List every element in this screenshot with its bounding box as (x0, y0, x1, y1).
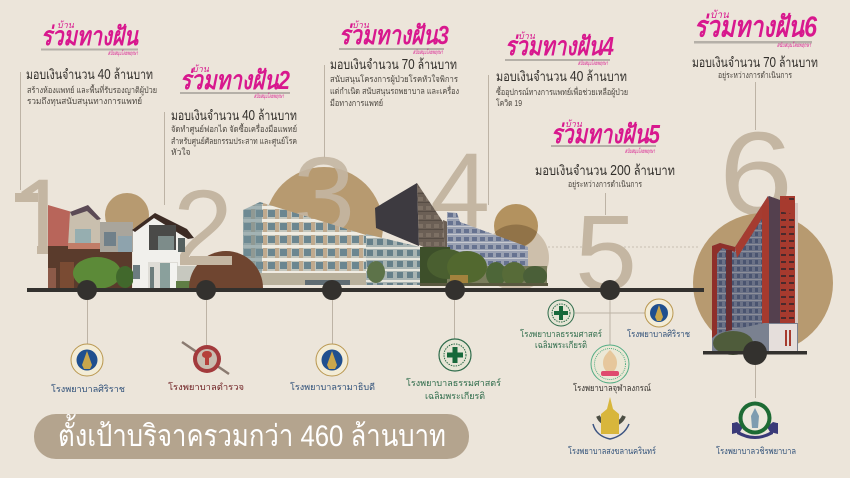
donation text 3: มอบเงินจำนวน 70 ล้านบาท (330, 56, 457, 73)
big number 4: 4 (430, 130, 490, 251)
building: townhouse 1 (48, 205, 134, 289)
circle backdrops (105, 167, 549, 291)
logo: Siriraj 1 (71, 344, 103, 376)
donation text 1: มอบเงินจำนวน 40 ล้านบาท (26, 66, 153, 83)
donation text 3: แต่กำเนิด สนับสนุนรถพยาบาล และเครื่อง (330, 85, 459, 97)
label: Thammasat small: โรงพยาบาลธรรมศาสตร์ (520, 328, 602, 339)
logo: Thammasat small (548, 300, 574, 326)
heading 1: สนับสนุนโดยพฤกษา (108, 49, 138, 57)
big number 1 (15, 180, 48, 254)
donation text 3 (330, 56, 459, 108)
building: white house 2 (132, 213, 200, 288)
donation text 4: ซื้ออุปกรณ์ทางการแพทย์เพื่อช่วยเหลือผู้ป่วย (496, 86, 628, 98)
heading 4: สนับสนุนโดยพฤกษา (578, 59, 608, 67)
heading 5 (551, 119, 660, 155)
logo: Thammasat (439, 339, 471, 371)
total target pill (34, 414, 469, 459)
donation text 1: สร้างห้องแพทย์ และพื้นที่รับรองญาติผู้ป่วย (27, 84, 157, 96)
heading 2 (180, 64, 290, 100)
building: dark tower (375, 183, 448, 262)
donation text 2: หัวใจ (171, 147, 191, 157)
donation text 1: รวมถึงทุนสนับสนุนทางการแพทย์ (27, 96, 142, 107)
donation text 2: จัดทำศูนย์ฟอกไต จัดซื้อเครื่องมือแพทย์ (171, 123, 297, 135)
donation text 5: อยู่ระหว่างการดำเนินการ (568, 179, 642, 190)
circle backdrop: brown (189, 251, 263, 288)
donation text 5: มอบเงินจำนวน 200 ล้านบาท (535, 162, 675, 179)
logo: Ramathibodi (316, 344, 348, 376)
donation text 4: มอบเงินจำนวน 40 ล้านบาท (496, 68, 627, 85)
donation text 3: มือทางการแพทย์ (330, 98, 383, 108)
logo: Vajira (732, 402, 778, 439)
label: Vajira: โรงพยาบาลวชิรพยาบาล (716, 446, 796, 456)
label: Ramathibodi: โรงพยาบาลรามาธิบดี (290, 382, 375, 392)
donation text 6 (692, 54, 818, 81)
label: Siriraj: โรงพยาบาลศิริราช (51, 384, 125, 394)
label: Thammasat: โรงพยาบาลธรรมศาสตร์ (406, 377, 501, 388)
big number 2: 2 (173, 167, 233, 288)
donation text 3: สนับสนุนโครงการผู้ป่วยโรคหัวใจพิการ (330, 74, 458, 85)
big number 5: 5 (575, 192, 637, 313)
logo: Siriraj small (645, 299, 673, 327)
heading 2: บ้าน (192, 64, 210, 74)
heading 4 (505, 31, 614, 67)
heading 5: สนับสนุนโดยพฤกษา (625, 147, 655, 155)
logo: Songkla (593, 397, 629, 439)
donation text 6: มอบเงินจำนวน 70 ล้านบาท (692, 54, 818, 71)
label: Police: โรงพยาบาลตำรวจ (168, 382, 244, 392)
heading 3: ร่วมทางฝัน3 (339, 20, 449, 50)
big number 1: 1 (11, 156, 71, 277)
label: Thammasat small: เฉลิมพระเกียรติ (535, 340, 587, 350)
timeline dots (77, 280, 620, 300)
total target pill: ตั้งเป้าบริจาครวมกว่า 460 ล้านบาท (58, 414, 446, 453)
building: apartments 3 (243, 202, 420, 285)
label: Thammasat: เฉลิมพระเกียรติ (425, 391, 485, 401)
heading 2: ร่วมทางฝัน2 (180, 65, 290, 95)
label: Thammasat (406, 377, 501, 401)
timeline bar (27, 288, 704, 292)
label: Chulalongkorn: โรงพยาบาลจุฬาลงกรณ์ (573, 382, 651, 394)
big number 6: 6 (719, 108, 793, 240)
donation text 6: อยู่ระหว่างการดำเนินการ (718, 70, 792, 81)
heading 5: บ้าน (565, 119, 583, 129)
donation text 1 (26, 66, 157, 107)
building: red tower 6 (703, 196, 807, 365)
number 2 bar over brown circle (190, 256, 232, 265)
logo: Police (182, 342, 229, 374)
donation text 4: โควิด 19 (496, 98, 522, 108)
heading 1: ร่วมทางฝัน (41, 21, 139, 51)
heading 6: ร่วมทางฝัน6 (694, 12, 818, 44)
heading 3: สนับสนุนโดยพฤกษา (413, 48, 443, 56)
heading 2: สนับสนุนโดยพฤกษา (254, 92, 284, 100)
heading 3: บ้าน (352, 20, 370, 30)
label: Thammasat small (520, 328, 602, 350)
donation text 5 (535, 162, 675, 190)
heading 4: บ้าน (518, 31, 536, 41)
heading 4: ร่วมทางฝัน4 (505, 31, 614, 61)
donation text 4 (496, 68, 628, 108)
building: apartments 4 (420, 212, 548, 286)
heading 6: บ้าน (710, 9, 730, 21)
heading 6: สนับสนุนโดยพฤกษา (777, 41, 811, 49)
heading 1: บ้าน (57, 20, 75, 30)
heading 6 (694, 9, 818, 49)
donation text 2 (171, 107, 297, 157)
vertical connector lines (20, 65, 756, 398)
donation text 2: สำหรับศูนย์ศัลยกรรมประสาท และศูนย์โรค (171, 136, 297, 147)
label: Siriraj small: โรงพยาบาลศิริราช (627, 329, 690, 339)
circle backdrop: building 6 (693, 213, 833, 353)
big number 3: 3 (293, 134, 355, 255)
donation text 2: มอบเงินจำนวน 40 ล้านบาท (171, 107, 297, 124)
logo: Chulalongkorn (591, 345, 629, 383)
label: Songkla: โรงพยาบาลสงขลานครินทร์ (568, 445, 656, 456)
heading 5: ร่วมทางฝัน5 (551, 119, 660, 149)
heading 1 (41, 20, 139, 57)
heading 3 (339, 20, 449, 56)
